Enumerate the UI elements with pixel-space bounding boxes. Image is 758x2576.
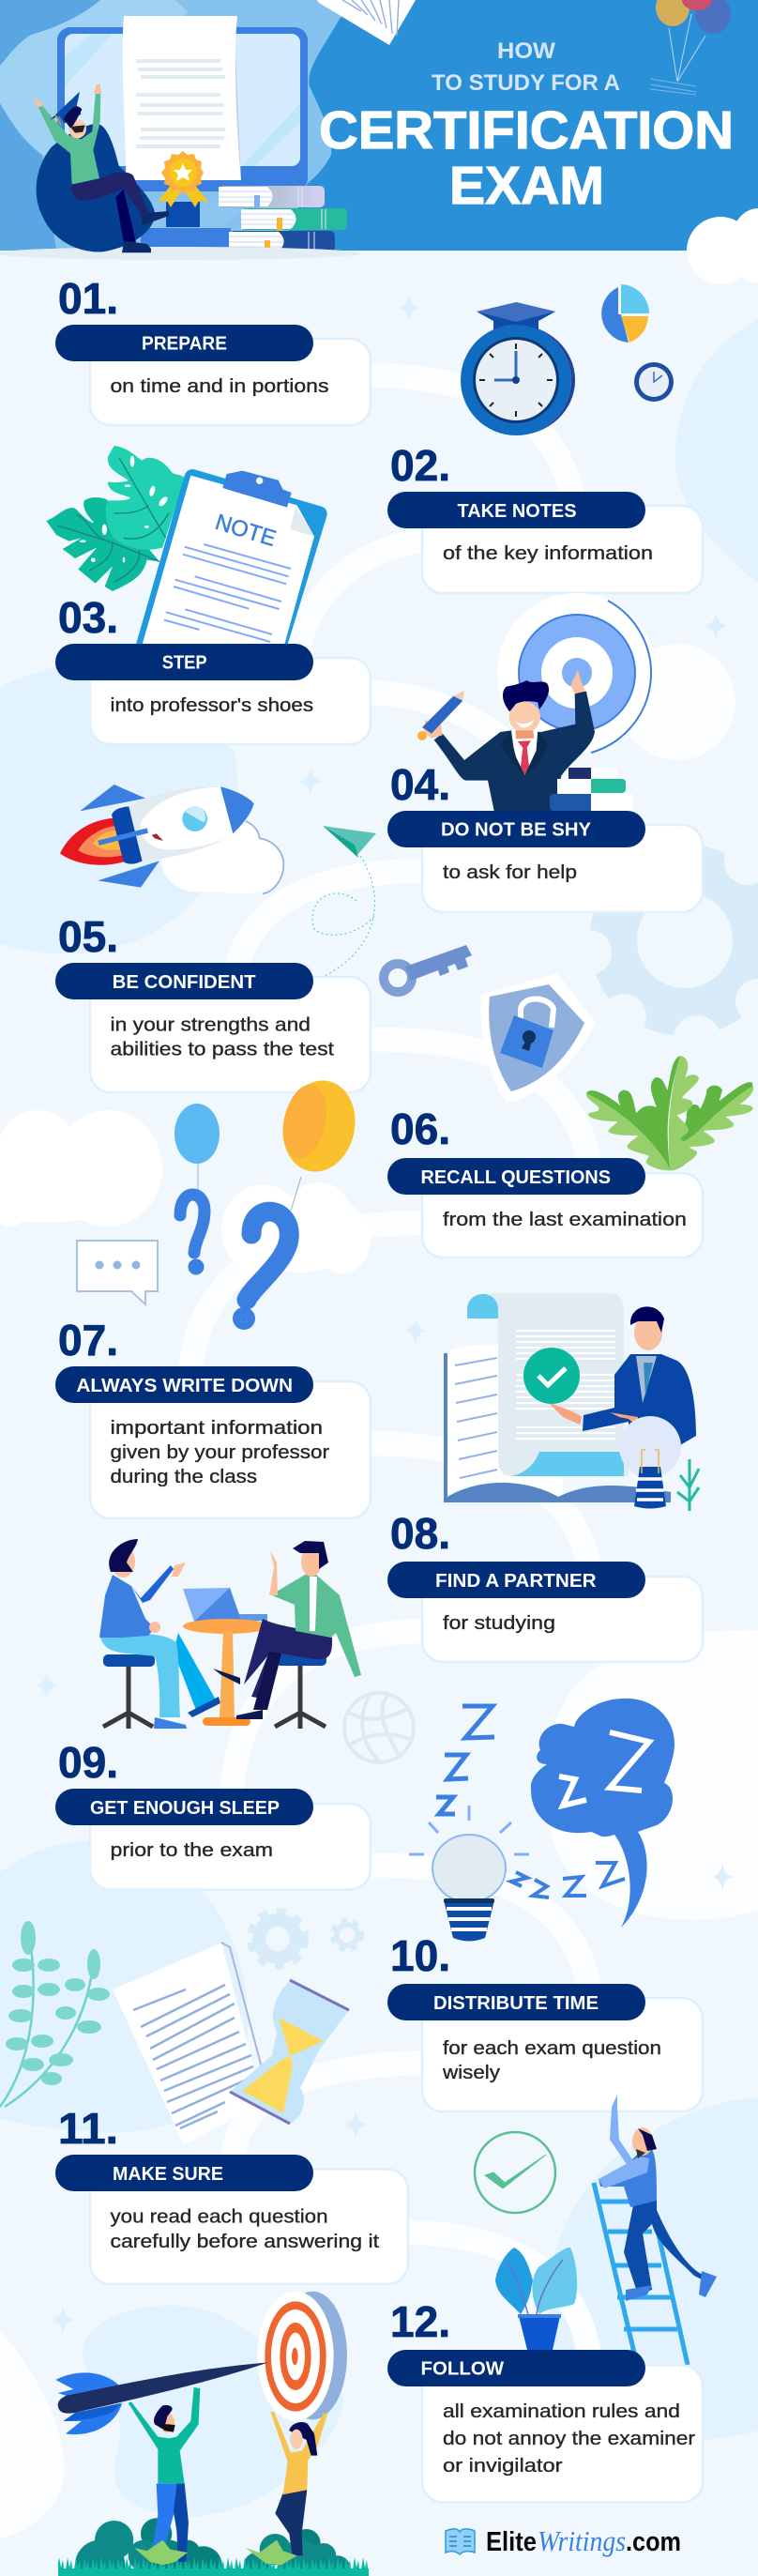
illustration: clipboard with note: NOTE	[212, 510, 279, 552]
illustration: clipboard with note	[136, 469, 327, 645]
step 10	[387, 1931, 703, 2111]
illustration: potted plant	[495, 2248, 577, 2350]
step 06	[387, 1105, 703, 1258]
step 02: 02.	[390, 441, 450, 490]
step 10: for each exam question	[443, 2037, 661, 2059]
illustration: sleeping bulb	[409, 1806, 529, 1941]
step 12: FOLLOW	[420, 2359, 504, 2380]
step 05: abilities to pass the test	[111, 1038, 334, 1060]
step 06: RECALL QUESTIONS	[420, 1167, 611, 1188]
flying paper sheet	[317, 0, 416, 45]
illustration: ladder	[594, 2183, 688, 2369]
step 06: from the last examination	[443, 1209, 687, 1230]
step 09	[55, 1738, 371, 1890]
header band	[0, 0, 758, 251]
illustration: cog icons	[252, 1913, 360, 1964]
step 12: 12.	[390, 2297, 450, 2346]
illustration: floating Z letters	[436, 1706, 625, 1898]
small shrubs in grass	[134, 2540, 297, 2565]
logo: EliteWritings.com: Writings	[538, 2524, 626, 2557]
illustration: businessman with pencil	[417, 670, 595, 811]
step 03: into professor's shoes	[111, 694, 313, 716]
header cloud	[687, 208, 758, 284]
header illustration: ground	[0, 247, 361, 260]
step 03: STEP	[162, 653, 207, 674]
illustration: target with white backing	[497, 593, 657, 753]
illustration: presenter man	[549, 1306, 696, 1445]
illustration: two students at a table	[99, 1539, 361, 1729]
illustration: blue balloon	[174, 1104, 220, 1192]
logo book icon	[446, 2529, 475, 2554]
illustration: right cloud	[221, 1182, 371, 1274]
header illustration: stack of books	[219, 186, 347, 253]
step 02: of the key information	[443, 542, 653, 564]
title: HOW	[497, 38, 555, 64]
illustration: stopwatch with cap	[461, 302, 575, 435]
step 04: to ask for help	[443, 861, 577, 883]
illustration: grass	[58, 2557, 369, 2576]
step 03: 03.	[58, 593, 118, 642]
logo: EliteWritings.com: .com	[626, 2527, 681, 2557]
header balloons	[650, 0, 731, 95]
illustration: small clock	[634, 362, 674, 402]
logo: EliteWritings.com	[446, 2524, 681, 2557]
step 09: GET ENOUGH SLEEP	[90, 1798, 280, 1819]
step 11: you read each question	[111, 2205, 328, 2228]
step 12	[387, 2297, 703, 2502]
header illustration: monitor	[57, 27, 308, 249]
decorative sparkles	[36, 295, 734, 2333]
step 02: TAKE NOTES	[458, 501, 576, 522]
illustration: woman holding target	[270, 2412, 327, 2555]
illustration: exam paper	[113, 1943, 272, 2145]
header illustration: award ribbon	[158, 151, 208, 207]
step 07: 07.	[58, 1316, 118, 1364]
step 01: on time and in portions	[111, 375, 328, 397]
white winding road	[190, 375, 589, 2355]
step 09: prior to the exam	[111, 1839, 273, 1861]
step 01: 01.	[58, 274, 118, 323]
illustration: rocket and cloud	[60, 785, 283, 894]
illustration: security shield with padlock	[480, 973, 596, 1103]
step 10: wisely	[442, 2062, 501, 2083]
step 11: MAKE SURE	[113, 2164, 223, 2185]
step 08: for studying	[443, 1612, 555, 1634]
illustration: man climbing ladder	[599, 2095, 717, 2301]
step 07: during the class	[111, 1466, 257, 1487]
gear: large background gear	[567, 838, 758, 1062]
background white shapes	[0, 644, 758, 2538]
header illustration: diploma paper	[123, 16, 241, 180]
step 11	[55, 2104, 408, 2284]
logo: EliteWritings.com: Elite	[486, 2527, 537, 2557]
title: CERTIFICATION	[319, 100, 734, 160]
illustration: pie chart	[601, 284, 649, 343]
illustration: globe	[344, 1693, 414, 1762]
step 04: DO NOT BE SHY	[441, 820, 592, 841]
step 07: given by your professor	[111, 1441, 329, 1463]
illustration: chat bubble	[77, 1241, 158, 1304]
step 11: 11.	[58, 2104, 118, 2153]
step 06: 06.	[390, 1105, 450, 1153]
title: TO STUDY FOR A	[432, 70, 620, 96]
illustration: hourglass	[230, 1980, 349, 2124]
illustration: paper plane and dotted trail	[312, 826, 376, 981]
step 01: PREPARE	[142, 334, 227, 355]
illustration: key	[384, 945, 472, 992]
illustration: monstera leaves	[46, 446, 185, 591]
illustration: teal branch	[0, 1921, 110, 2107]
illustration: giant dart	[55, 2362, 268, 2434]
step 05: 05.	[58, 912, 118, 961]
step 12: or invigilator	[443, 2455, 563, 2477]
title: EXAM	[449, 156, 604, 216]
step 01	[55, 274, 371, 425]
step 10: DISTRIBUTE TIME	[433, 1993, 599, 2014]
step 04: 04.	[390, 760, 450, 809]
illustration: idea bulb by presenter	[619, 1416, 699, 1511]
illustration: big question mark	[240, 1212, 289, 1322]
step 09: 09.	[58, 1738, 118, 1787]
step 04	[387, 760, 703, 912]
step 05: BE CONFIDENT	[113, 972, 256, 993]
step 07: important information	[111, 1417, 323, 1439]
illustration: books by businessman	[550, 768, 632, 811]
step 07	[55, 1316, 371, 1518]
step 08	[387, 1509, 703, 1662]
title	[319, 38, 734, 216]
illustration: man holding dart	[129, 2387, 200, 2562]
illustration: green plant	[586, 1056, 753, 1170]
illustration: orange balloon	[275, 1074, 363, 1211]
illustration: left cloud	[0, 1110, 162, 1227]
header illustration: graduate on beanbag	[33, 84, 169, 252]
illustration: bushes	[75, 2518, 350, 2576]
step 07: ALWAYS WRITE DOWN	[76, 1376, 293, 1396]
step 10: 10.	[390, 1931, 450, 1980]
step 11: carefully before answering it	[111, 2231, 379, 2252]
step 05: in your strengths and	[111, 1014, 311, 1036]
step 05	[55, 912, 371, 1092]
illustration: sleep thought cloud	[531, 1699, 675, 1928]
illustration: open book and scroll	[444, 1293, 671, 1502]
step 12: do not annoy the examiner	[443, 2428, 695, 2449]
illustration: check mark circle	[475, 2132, 555, 2213]
step 08: FIND A PARTNER	[435, 1571, 597, 1592]
step 08: 08.	[390, 1509, 450, 1558]
step 03	[55, 593, 371, 744]
step 02	[387, 441, 703, 593]
illustration: dartboard target	[257, 2292, 347, 2421]
step 12: all examination rules and	[443, 2401, 680, 2422]
illustration: small question mark	[180, 1195, 205, 1271]
